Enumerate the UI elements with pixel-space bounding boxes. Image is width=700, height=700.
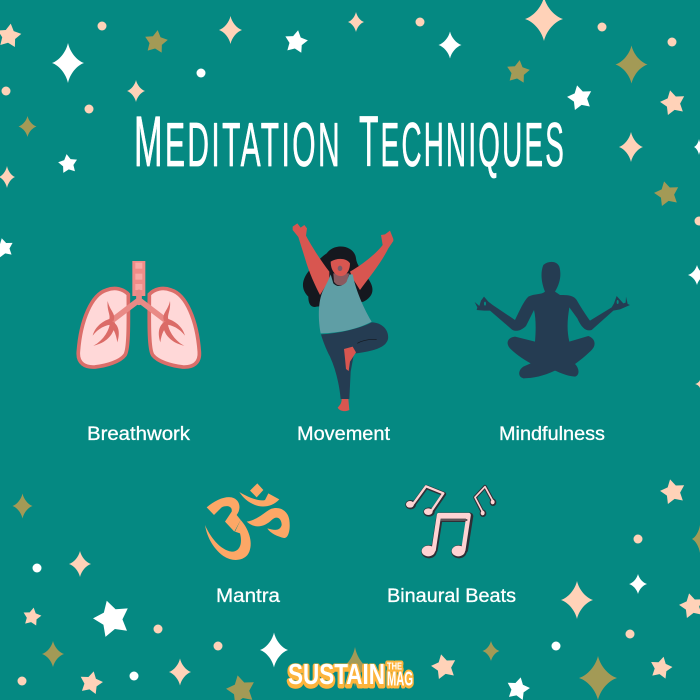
label: Movement: Movement — [297, 424, 391, 445]
logo: Sustain the Mag: MAG — [387, 668, 413, 690]
logo: Sustain the Mag: MAG — [387, 669, 413, 691]
logo: Sustain the Mag: THE — [387, 662, 402, 672]
icon: om symbol — [205, 483, 290, 560]
label: Binaural Beats: Binaural Beats — [387, 586, 516, 607]
icon: meditating silhouette — [475, 262, 630, 378]
title: MEDITATION — [134, 103, 342, 182]
label: Breathwork: Breathwork — [87, 424, 191, 445]
icon: woman in tree pose — [293, 223, 393, 411]
icon: lungs — [78, 261, 199, 367]
logo: Sustain the Mag: SUSTAIN — [288, 659, 385, 691]
logo: Sustain the Mag: THE — [387, 662, 402, 673]
logo: Sustain the Mag: SUSTAIN — [288, 661, 385, 693]
label: Mantra: Mantra — [216, 586, 280, 607]
icon: music notes — [406, 486, 496, 557]
label: Mindfulness: Mindfulness — [499, 424, 605, 445]
